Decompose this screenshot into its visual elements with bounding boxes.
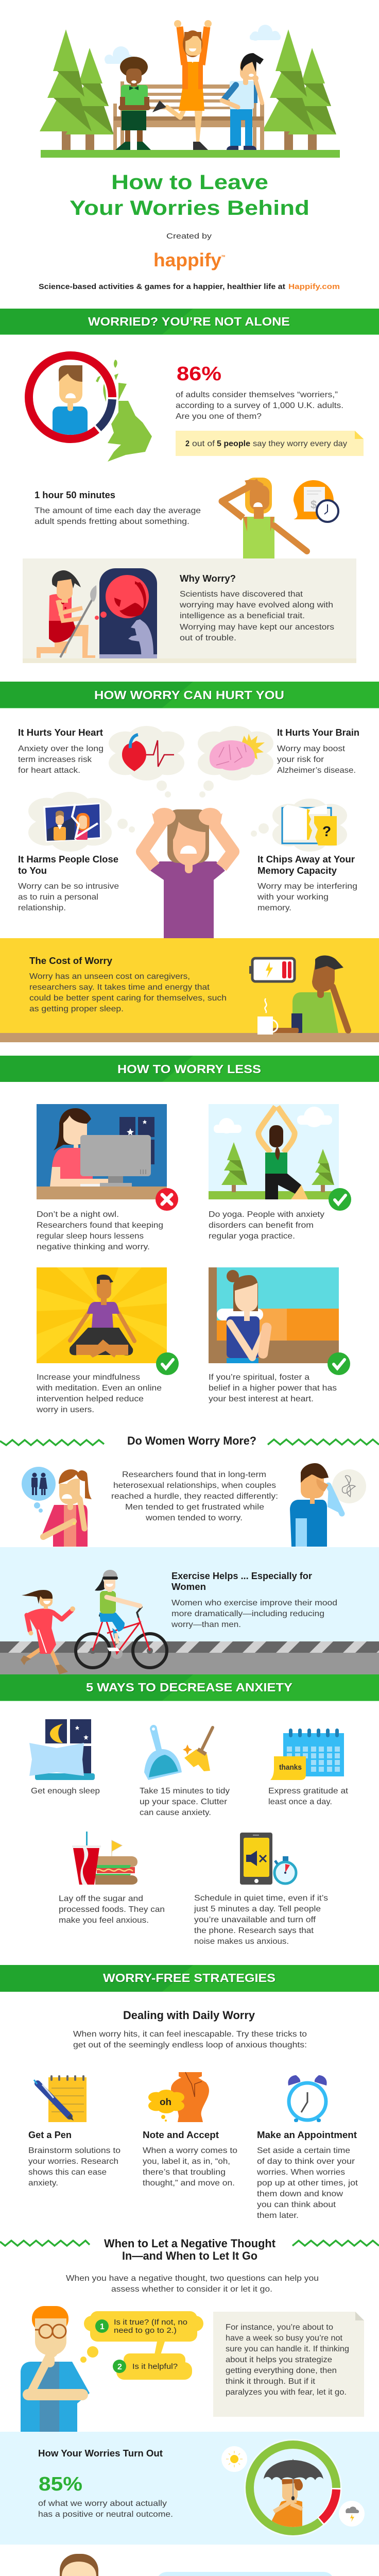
night owl text — [37, 1210, 163, 1251]
why worry text — [179, 573, 334, 642]
text: hurts heart: term increases risk — [18, 755, 92, 764]
panel: the cost of worry — [0, 938, 379, 1042]
gratitude text: Express gratitude at — [268, 1787, 349, 1795]
way: gratitude — [268, 1728, 349, 1806]
note panel: for instance: think it through. But if it — [226, 2377, 316, 2386]
exercise text: Exercise Helps ... Especially for — [171, 1571, 312, 1581]
tidy text: Take 15 minutes to tidy — [140, 1787, 230, 1795]
quiet time text: the phone. Research says that — [194, 1926, 314, 1935]
card: yoga — [209, 1104, 351, 1241]
bill and clock icon — [294, 480, 338, 522]
right trees — [262, 29, 336, 150]
outcome heading: How Your Worries Turn Out — [38, 2448, 163, 2459]
gratitude text: least once a day. — [268, 1798, 332, 1806]
icon: sun — [221, 2446, 247, 2472]
note text — [143, 2130, 237, 2188]
text: chips away at memory: Worry may be interfering — [257, 882, 357, 891]
cost text: researchers say. It takes time and energy that — [29, 983, 210, 992]
centre woman, jumping with joy — [152, 20, 212, 150]
bench — [113, 81, 264, 150]
heading: when to let a negative thought in: In—and When to Let It Go — [122, 2249, 257, 2262]
question 2: Is it helpful? — [132, 2362, 178, 2371]
note text: you, label it, as in, “oh, — [143, 2157, 230, 2166]
appointment text: Make an Appointment — [257, 2130, 357, 2140]
strategy: note and accept — [143, 2072, 237, 2188]
tired man with coffee — [257, 955, 348, 1035]
title: How to Leave — [111, 171, 268, 194]
thought cloud with heart — [109, 726, 184, 798]
clouds — [105, 25, 281, 64]
meditation text — [36, 1373, 162, 1414]
time stat: 1 hour 50 minutes — [35, 490, 115, 500]
cost text: as getting proper sleep. — [29, 1005, 124, 1013]
outcome text: has a positive or neutral outcome. — [38, 2510, 173, 2519]
badge: don't — [156, 1188, 178, 1211]
yoga text — [209, 1210, 324, 1241]
intro text: get out of the seemingly endless loop of anxious thoughts: — [73, 2041, 307, 2049]
text: harms people close: as to ruin a personal — [18, 893, 98, 902]
note text: there’s that troubling — [143, 2168, 226, 2177]
question 1: Is it true? (If not, no — [114, 2318, 187, 2327]
cost text: Worry has an unseen cost on caregivers, — [29, 972, 190, 981]
section banner: 5 ways: 5 WAYS TO DECREASE ANXIETY — [86, 1681, 292, 1694]
worried person — [53, 365, 88, 437]
cost text: could be better spent caring for themselves, such — [29, 994, 227, 1003]
tidy text: can cause anxiety. — [140, 1808, 211, 1817]
night owl text: Researchers found that keeping — [37, 1221, 163, 1230]
negative thought intro: assess whether to consider it or let it go. — [111, 2285, 272, 2294]
section banner: worry-free strategies: WORRY-FREE STRATEGIES — [103, 1971, 275, 1985]
card: spirituality — [209, 1267, 350, 1403]
quiet time text — [194, 1894, 328, 1946]
number 2: 2 — [117, 2363, 122, 2371]
section banner: how to worry less — [0, 1056, 379, 1082]
happify logo: happify — [153, 249, 221, 270]
appointment text: of day to think over your — [257, 2157, 355, 2166]
appointment text: them later. — [257, 2211, 299, 2220]
section banner: worried — [0, 309, 379, 335]
quiet time text: Schedule in quiet time, even if it’s — [194, 1894, 328, 1903]
happify logo: TM — [221, 255, 225, 258]
food text — [59, 1894, 165, 1925]
negative thought intro: When you have a negative thought, two questions can help you — [66, 2274, 319, 2283]
thoughtful man with glasses — [21, 2306, 90, 2432]
text: hurts brain: your risk for — [277, 755, 324, 764]
heading: do women worry more — [0, 1434, 379, 1447]
stressed woman figure — [222, 478, 307, 558]
appointment text: pop up at other times, jot — [257, 2179, 358, 2188]
spirituality text: If you’re spiritual, foster a — [209, 1373, 309, 1382]
tagline: Science-based activities & games for a happier, healthier life at — [39, 282, 285, 291]
hero illustration: three people at a park bench — [40, 20, 340, 158]
note: 2 out of 5: say they worry every day — [253, 439, 347, 448]
heading: when to let a negative thought in — [0, 2237, 379, 2262]
section banner: how to worry less: HOW TO WORRY LESS — [117, 1062, 261, 1076]
icon: cracked vase with oh bubble: oh — [160, 2097, 171, 2107]
appointment text — [256, 2130, 358, 2220]
central worried person — [142, 808, 233, 938]
runner — [21, 1590, 75, 1674]
appointment text: you can think about — [257, 2200, 336, 2209]
couples text: Researchers found that in long-term — [122, 1470, 266, 1479]
why worry text: out of trouble. — [180, 634, 236, 642]
number 1 — [95, 2319, 109, 2333]
couples text: Men tended to get frustrated while — [125, 1503, 264, 1512]
number 1: 1 — [100, 2323, 105, 2331]
yoga text: regular yoga practice. — [209, 1232, 295, 1241]
yoga text: Do yoga. People with anxiety — [209, 1210, 324, 1219]
icon: window and pillow — [29, 1719, 95, 1780]
quiet time text: noise makes us anxious. — [194, 1937, 289, 1946]
quote bubble — [144, 2572, 352, 2576]
text: harms people close: relationship. — [18, 904, 66, 912]
text: chips away at memory — [257, 854, 357, 912]
quote: bearded man — [45, 2554, 113, 2576]
right man, biting nails — [222, 53, 264, 150]
night owl text: regular sleep hours lessens — [37, 1232, 144, 1241]
text: hurts heart: Anxiety over the long — [18, 744, 104, 753]
UK map — [96, 360, 152, 462]
text: hurts brain: Alzheimer’s disease. — [277, 766, 356, 775]
gratitude text — [268, 1787, 349, 1806]
way: quiet time — [194, 1833, 328, 1946]
strategy: get a pen — [28, 2075, 120, 2188]
stat 86%: 86% — [177, 363, 221, 385]
icon: calendar and thanks note — [270, 1728, 344, 1780]
spirituality text: your best interest at heart. — [209, 1395, 314, 1403]
heading: dealing with daily worry: Dealing with Daily Worry — [123, 2009, 255, 2022]
icon: cracked vase with oh bubble — [148, 2072, 209, 2122]
text: harms people close — [18, 854, 119, 912]
text: hurts heart — [18, 727, 104, 775]
negative thought intro — [66, 2274, 319, 2294]
way: sleep: Get enough sleep — [31, 1787, 100, 1795]
icon: storm cloud — [339, 2501, 365, 2527]
stat description: of adults consider themselves “worriers,” — [176, 391, 338, 399]
couples text: reached a hurdle, they reacted differently: — [111, 1492, 278, 1501]
badge: do — [329, 1188, 351, 1211]
tagline: Happify.com — [288, 282, 340, 291]
meditation text: worry in users. — [36, 1405, 94, 1414]
exercise text: more dramatically—including reducing — [171, 1609, 324, 1618]
left trees — [40, 29, 114, 150]
food text: make you feel anxious. — [59, 1916, 149, 1925]
spirituality text — [209, 1373, 337, 1403]
why worry text: intelligence as a beneficial trait. — [180, 612, 305, 620]
couples text: women tended to worry. — [145, 1514, 243, 1522]
meditation text: intervention helped reduce — [37, 1395, 144, 1403]
meditation text: Increase your mindfulness — [37, 1373, 140, 1382]
icon: dustpan and broom — [144, 1725, 213, 1780]
food text: processed foods. They can — [59, 1905, 165, 1914]
why worry text: worrying may have evolved along with — [179, 601, 333, 609]
title — [70, 171, 309, 219]
cost text: The Cost of Worry — [29, 956, 112, 966]
quiet time text: just 5 minutes a day. Tell people — [194, 1905, 321, 1913]
text: chips away at memory: Memory Capacity — [257, 866, 337, 876]
text: hurts heart: It Hurts Your Heart — [18, 727, 103, 738]
thought: scribble — [332, 1469, 366, 1503]
couples text — [111, 1470, 278, 1522]
pen text: shows this can ease — [28, 2168, 107, 2177]
note panel: for instance — [213, 2312, 364, 2417]
text: hurts heart: for heart attack. — [18, 766, 80, 775]
meditation text: with meditation. Even an online — [36, 1384, 162, 1393]
panel: how your worries turn out — [0, 2432, 379, 2545]
yoga text: disorders can benefit from — [209, 1221, 314, 1230]
left woman, worried — [115, 57, 151, 150]
way: tidy — [140, 1725, 230, 1817]
note panel: for instance: sure you can handle it. If thinking — [226, 2345, 349, 2353]
cost text — [29, 956, 227, 1013]
strategy: make an appointment — [256, 2075, 358, 2220]
appointment text: Set aside a certain time — [257, 2146, 350, 2155]
time stat — [35, 490, 201, 526]
tidy text — [140, 1787, 230, 1817]
bill and clock icon: $ — [311, 498, 317, 511]
outcome text: of what we worry about actually — [38, 2499, 167, 2508]
caveman with spear — [37, 570, 96, 658]
intro text: When worry hits, it can feel inescapable. Try these tricks to — [73, 2030, 307, 2039]
title: Your Worries Behind — [70, 197, 309, 219]
note: 2 out of 5: 2 — [185, 439, 190, 448]
text: harms people close: It Harms People Close — [18, 854, 118, 865]
pen text — [28, 2130, 120, 2188]
pen text: Get a Pen — [28, 2130, 72, 2140]
quiet time text: you’re unavailable and turn off — [194, 1916, 316, 1924]
stat description: Are you one of them? — [176, 412, 262, 421]
text: chips away at memory: memory. — [257, 904, 291, 912]
icon: notepad and pen — [34, 2075, 87, 2122]
thought cloud with torn book: ? — [322, 823, 331, 839]
card: meditation — [36, 1267, 179, 1414]
yellow thought bubbles with questions — [80, 2311, 203, 2380]
red and navy ring — [29, 355, 112, 439]
note panel: for instance: For instance, you’re about to — [226, 2323, 333, 2332]
question 1 — [114, 2318, 187, 2335]
intro text — [73, 2030, 307, 2049]
text: chips away at memory: with your working — [257, 893, 329, 902]
frustrated man with scribble thought — [290, 1463, 366, 1547]
icon: soda and hot dog — [72, 1832, 137, 1885]
text: harms people close: to You — [18, 866, 47, 876]
appointment text: them down and know — [257, 2190, 343, 2198]
door with peephole and bear — [95, 568, 157, 658]
note: 2 out of 5: 5 people — [217, 439, 250, 448]
section banner: 5 ways — [0, 1674, 379, 1701]
note text: Note and Accept — [143, 2130, 219, 2140]
worried woman with couple thought — [22, 1467, 92, 1547]
time stat: The amount of time each day the average — [35, 506, 201, 515]
exercise text — [171, 1571, 337, 1629]
created by: Created by — [166, 232, 212, 241]
cyclist on bicycle — [76, 1570, 167, 1668]
note panel: for instance: paralyzes you with fear, let it go. — [226, 2388, 347, 2397]
way: sleep — [29, 1719, 100, 1795]
food text: Lay off the sugar and — [59, 1894, 143, 1903]
UK map with person in ring icon — [29, 355, 152, 462]
pen text: anxiety. — [28, 2179, 58, 2188]
why worry text: Why Worry? — [180, 573, 236, 584]
number 2 — [113, 2360, 126, 2373]
note panel: for instance: about it helps you strategize — [226, 2355, 332, 2364]
note text: thought,” and move on. — [143, 2179, 235, 2188]
way: food — [59, 1832, 165, 1925]
section banner: worry-free strategies — [0, 1965, 379, 1992]
note panel: for instance: have a week so busy you’re not — [226, 2334, 343, 2343]
thought cloud with torn photo — [28, 792, 135, 852]
thought: couple — [22, 1467, 56, 1513]
text: harms people close: Worry can be so intrusive — [18, 882, 119, 891]
heading: do women worry more: Do Women Worry More? — [127, 1434, 256, 1447]
text: hurts brain: Worry may boost — [277, 744, 346, 753]
note panel: for instance: getting everything done, then — [226, 2366, 337, 2375]
text: hurts brain: It Hurts Your Brain — [277, 727, 359, 738]
note: 2 out of 5 — [176, 431, 364, 456]
stat description: according to a survey of 1,000 U.K. adults. — [176, 401, 343, 410]
exercise text: Women — [171, 1582, 206, 1592]
thought cloud with brain — [198, 726, 273, 798]
note: 2 out of 5: out of — [192, 439, 215, 448]
night owl text: negative thinking and worry. — [37, 1243, 150, 1251]
pen text: your worries. Research — [28, 2157, 118, 2166]
spirituality text: belief in a higher power that has — [209, 1384, 337, 1393]
stat 85%: 85% — [39, 2473, 82, 2495]
couples text: heterosexual relationships, when couples — [113, 1481, 276, 1490]
pen text: Brainstorm solutions to — [28, 2146, 120, 2155]
section banner: worried: WORRIED? YOU’RE NOT ALONE — [88, 315, 290, 328]
exercise text: worry—than men. — [171, 1620, 241, 1629]
icon: muted phone and stopwatch — [240, 1833, 296, 1885]
stat description — [176, 391, 343, 421]
badge: do — [156, 1352, 179, 1375]
outcome text — [38, 2499, 173, 2519]
card: night owl — [37, 1104, 178, 1251]
panel: why worry — [23, 558, 356, 663]
appointment text: worries. When worries — [256, 2168, 345, 2177]
tidy text: up your space. Clutter — [140, 1798, 228, 1806]
section banner: how worry can hurt you — [0, 682, 379, 708]
note text: When a worry comes to — [143, 2146, 237, 2155]
low battery icon — [249, 958, 295, 981]
time stat: adult spends fretting about something. — [35, 517, 190, 526]
why worry text: Scientists have discovered that — [180, 590, 303, 599]
badge: do — [328, 1352, 350, 1375]
panel: exercise — [0, 1547, 379, 1674]
icon: calendar and thanks note: thanks — [279, 1763, 302, 1772]
icon: alarm clock — [288, 2075, 327, 2122]
green and red ring with umbrella person — [244, 2439, 342, 2537]
why worry text: Worrying may have kept our ancestors — [180, 623, 334, 632]
night owl text: Don’t be a night owl. — [37, 1210, 119, 1219]
ground — [41, 150, 340, 158]
heading: when to let a negative thought in: When to Let a Negative Thought — [104, 2237, 276, 2250]
text: hurts brain — [277, 727, 359, 775]
text: chips away at memory: It Chips Away at Your — [257, 854, 355, 865]
question 1: need to go to 2.) — [114, 2326, 177, 2335]
exercise text: Women who exercise improve their mood — [171, 1599, 337, 1607]
section banner: how worry can hurt you: HOW WORRY CAN HURT YOU — [94, 688, 284, 702]
thought cloud with torn book — [251, 799, 347, 852]
